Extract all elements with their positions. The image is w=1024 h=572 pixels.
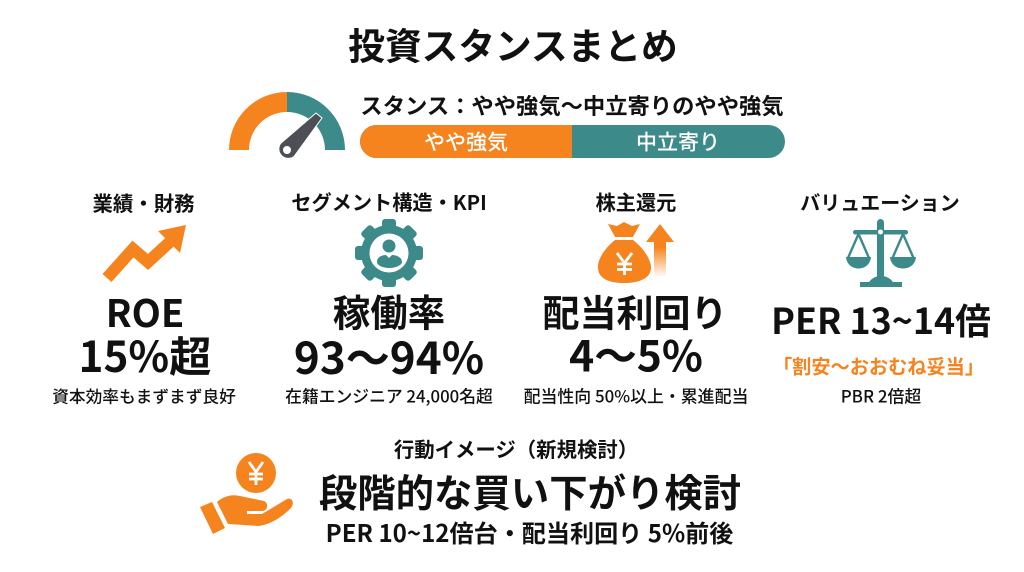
- callout: valuation view: 「割安～おおむね妥当」: [773, 351, 984, 379]
- metric: ROE value: 15%超: [79, 324, 211, 385]
- stance bar label: right: 中立寄り: [636, 126, 720, 156]
- metric: PER: PER 13~14倍: [771, 293, 991, 345]
- metric: yield label: 配当利回り: [542, 284, 728, 338]
- note: PBR: PBR 2倍超: [841, 383, 921, 408]
- metric: utilization value: 93～94%: [294, 323, 484, 387]
- title: 投資スタンスまとめ: [348, 17, 678, 71]
- stance heading: スタンス：やや強気～中立寄りのやや強気: [360, 89, 784, 121]
- heading: performance: 業績・財務: [93, 187, 194, 217]
- stance bar: [360, 125, 785, 158]
- action detail: PER 10~12倍台・配当利回り 5%前後: [326, 514, 733, 549]
- note: ROE: 資本効率もまずまず良好: [52, 384, 236, 408]
- panel: segments: [285, 187, 493, 408]
- metric: yield value: 4～5%: [569, 324, 703, 385]
- metric: ROE label: ROE: [106, 283, 184, 338]
- panel: action image: [200, 433, 741, 549]
- metric: utilization label: 稼働率: [333, 283, 445, 337]
- panel: valuation: [771, 187, 991, 408]
- heading: segments: セグメント構造・KPI: [291, 187, 487, 216]
- heading: shareholder returns: 株主還元: [596, 187, 676, 216]
- stance bar: orange segment: [360, 125, 572, 158]
- panel: performance: [52, 187, 236, 408]
- action headline: 段階的な買い下がり検討: [319, 463, 741, 519]
- heading: valuation: バリュエーション: [800, 187, 960, 216]
- heading: action: 行動イメージ（新規検討）: [394, 433, 638, 463]
- note: engineers: 在籍エンジニア 24,000名超: [285, 384, 493, 408]
- stance bar label: left: やや強気: [424, 126, 508, 156]
- panel: shareholder returns: [524, 187, 748, 408]
- note: payout: 配当性向 50%以上・累進配当: [524, 383, 748, 408]
